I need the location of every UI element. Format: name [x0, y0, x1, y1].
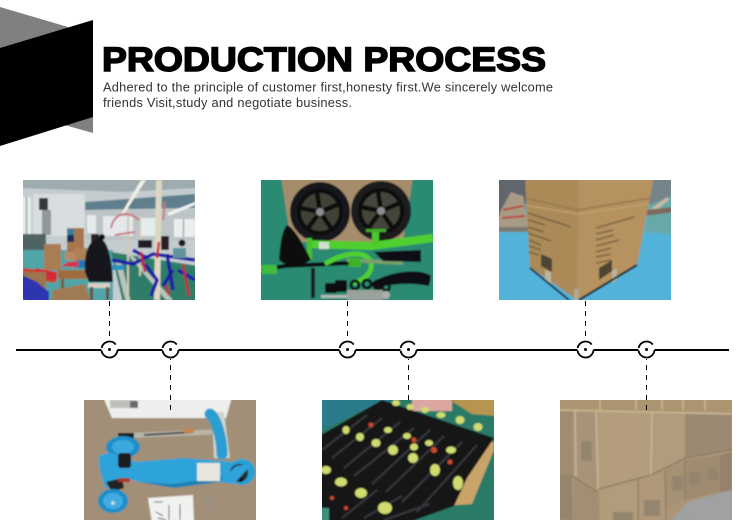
subtitle text: Adhered to the principle of customer first,honesty first.We sincerely welcome [103, 80, 553, 94]
photo: factory assembly line [23, 180, 195, 300]
timeline connectors [110, 301, 646, 410]
photo: black scooter decks stacked on pallet [322, 400, 494, 520]
title: PRODUCTION PROCESS [102, 41, 546, 79]
photo: balance bike parts [261, 180, 433, 300]
timeline markers [101, 341, 655, 358]
header emblem [0, 7, 93, 146]
rear wheel [351, 181, 411, 241]
photo: packed carton on floor [499, 180, 671, 300]
subtitle text [103, 80, 553, 110]
photo: blue kick scooter [84, 400, 256, 520]
timeline axis [16, 349, 729, 351]
subtitle text: friends Visit,study and negotiate business. [103, 95, 352, 110]
photo: wall of stacked cartons [560, 400, 732, 520]
front wheel [290, 182, 350, 242]
